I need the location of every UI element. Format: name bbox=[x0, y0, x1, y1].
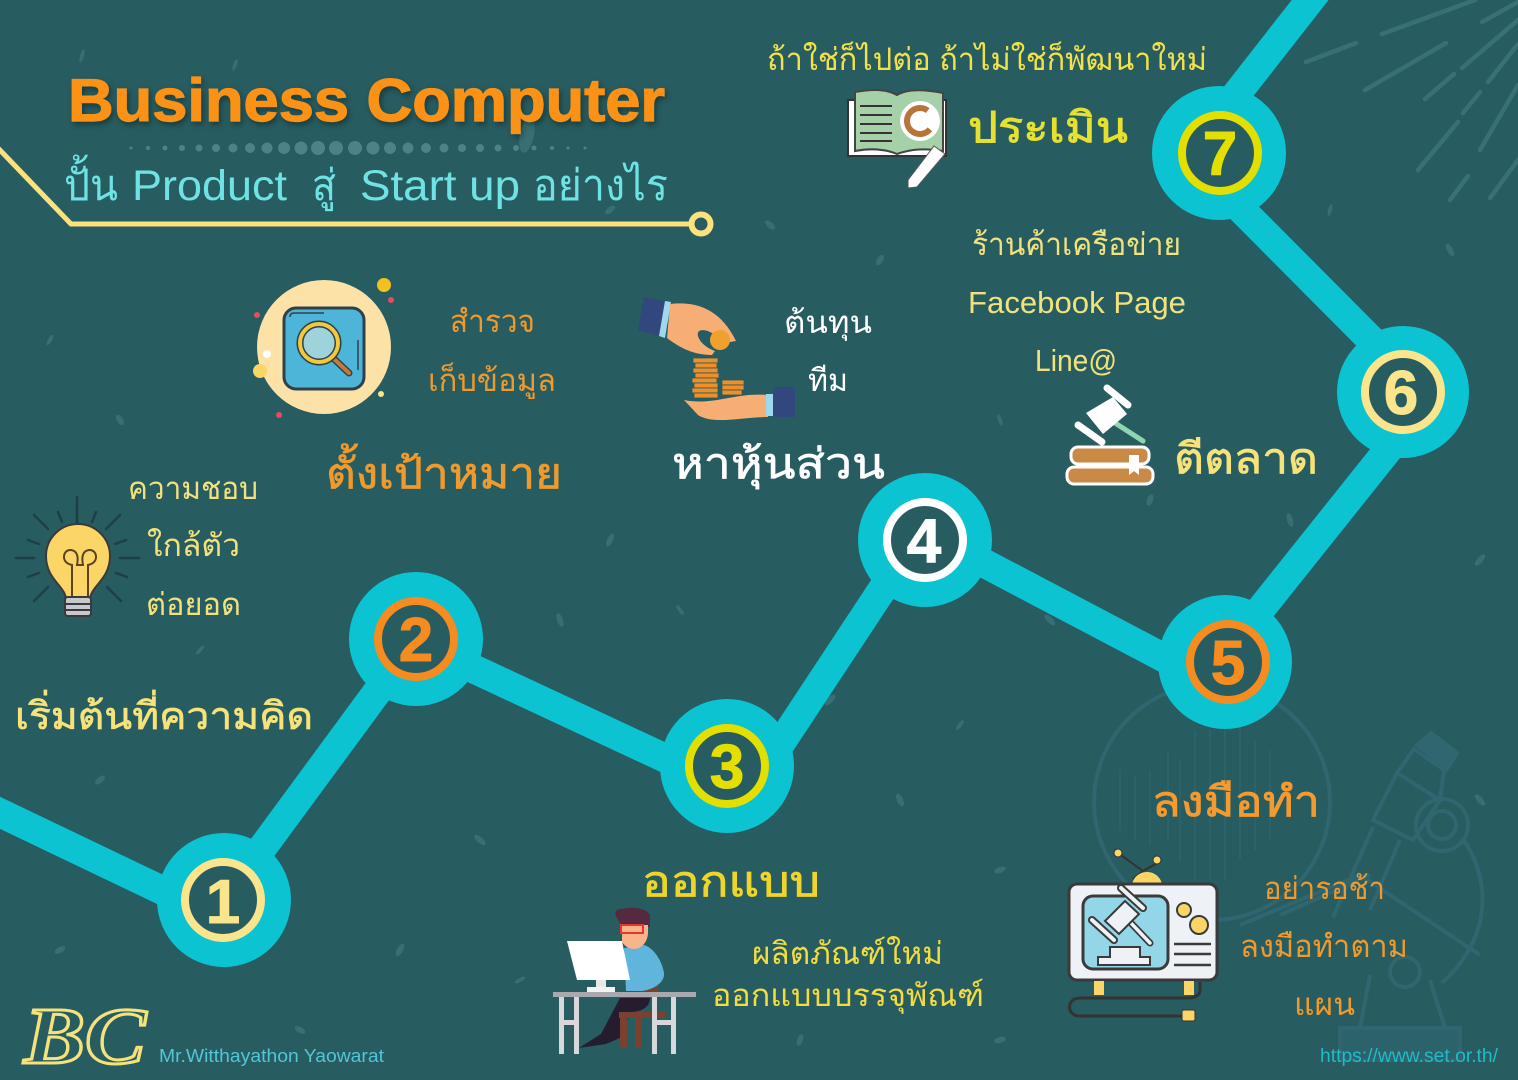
text: action bullets: อย่ารอช้า bbox=[1264, 871, 1385, 906]
node 4: 4 bbox=[907, 507, 942, 576]
node 7: 7 bbox=[1203, 120, 1237, 189]
author credit: Mr.Witthayathon Yaowarat bbox=[159, 1045, 384, 1066]
dotted decoration bbox=[130, 141, 586, 155]
text: design bullets: ผลิตภัณฑ์ใหม่ bbox=[752, 936, 943, 971]
node 2 bbox=[349, 572, 483, 706]
text: idea bullets: ความชอบ bbox=[128, 471, 258, 506]
node 1 bbox=[157, 833, 291, 967]
text: action bullets: ลงมือทำตาม bbox=[1240, 929, 1408, 964]
text: marketing channels: Line@ bbox=[1035, 343, 1117, 378]
text: funding bullets: ทีม bbox=[808, 363, 848, 398]
heading: take action: ลงมือทำ bbox=[1152, 778, 1320, 825]
text: idea bullets: ใกล้ตัว bbox=[147, 528, 240, 563]
top note: ถ้าใช่ก็ไปต่อ ถ้าไม่ใช่ก็พัฒนาใหม่ bbox=[767, 41, 1207, 77]
title underline connector bbox=[0, 146, 710, 234]
icon: person at desk bbox=[553, 908, 696, 1054]
text: design bullets bbox=[712, 936, 984, 1015]
heading: set goals: ตั้งเป้าหมาย bbox=[326, 443, 562, 497]
heading: hit market: ตีตลาด bbox=[1174, 435, 1318, 482]
icon: book and pencil bbox=[848, 90, 946, 188]
heading: find partner: หาหุ้นส่วน bbox=[672, 440, 885, 490]
text: survey bullets: สำรวจ bbox=[450, 304, 535, 339]
text: idea bullets: ต่อยอด bbox=[146, 587, 241, 622]
heading: design: ออกแบบ bbox=[642, 858, 820, 905]
node 2: 2 bbox=[399, 606, 433, 675]
node 6 bbox=[1337, 326, 1469, 458]
text: action bullets bbox=[1240, 871, 1408, 1022]
text: design bullets: ออกแบบบรรจุพัณฑ์ bbox=[712, 978, 984, 1015]
node 1: 1 bbox=[206, 868, 240, 937]
text: funding bullets bbox=[784, 305, 872, 398]
node 7 bbox=[1152, 86, 1286, 220]
rays decoration bbox=[1306, 0, 1518, 200]
text: marketing channels: ร้านค้าเครือข่าย bbox=[972, 227, 1181, 262]
subtitle: สู่ bbox=[312, 162, 336, 212]
text: marketing channels bbox=[968, 227, 1186, 378]
node 5 bbox=[1158, 595, 1292, 729]
icon: gavel and books bbox=[1067, 388, 1153, 484]
source url: https://www.set.or.th/ bbox=[1320, 1046, 1499, 1067]
title: Business Computer bbox=[68, 67, 665, 134]
node 4 bbox=[858, 473, 992, 607]
subtitle: Product bbox=[132, 162, 287, 210]
text: idea bullets bbox=[128, 471, 258, 622]
subtitle: อย่างไร bbox=[533, 161, 668, 210]
icon: magnifier bbox=[253, 278, 394, 418]
icon: coins and hands bbox=[638, 297, 795, 420]
logo BC: BC bbox=[23, 993, 148, 1080]
heading: start: เริ่มต้นที่ความคิด bbox=[15, 690, 313, 738]
node 3: 3 bbox=[710, 733, 744, 802]
main path line bbox=[0, 0, 1403, 920]
text: action bullets: แผน bbox=[1294, 987, 1355, 1022]
node 3 bbox=[660, 699, 794, 833]
icon: TV with gavel bbox=[1069, 849, 1217, 1021]
node 6: 6 bbox=[1384, 359, 1418, 428]
text: funding bullets: ต้นทุน bbox=[784, 305, 872, 342]
icon: light bulb bbox=[16, 497, 139, 616]
subtitle bbox=[64, 154, 668, 212]
node 5: 5 bbox=[1211, 629, 1245, 698]
text: survey bullets: เก็บข้อมูล bbox=[428, 362, 556, 399]
text: survey bullets bbox=[428, 304, 556, 399]
subtitle: ปั้น bbox=[64, 154, 118, 210]
text: marketing channels: Facebook Page bbox=[968, 285, 1186, 320]
faint microscope background bbox=[1094, 684, 1482, 1060]
subtitle: Start up bbox=[360, 162, 520, 210]
heading: evaluate: ประเมิน bbox=[968, 104, 1128, 151]
